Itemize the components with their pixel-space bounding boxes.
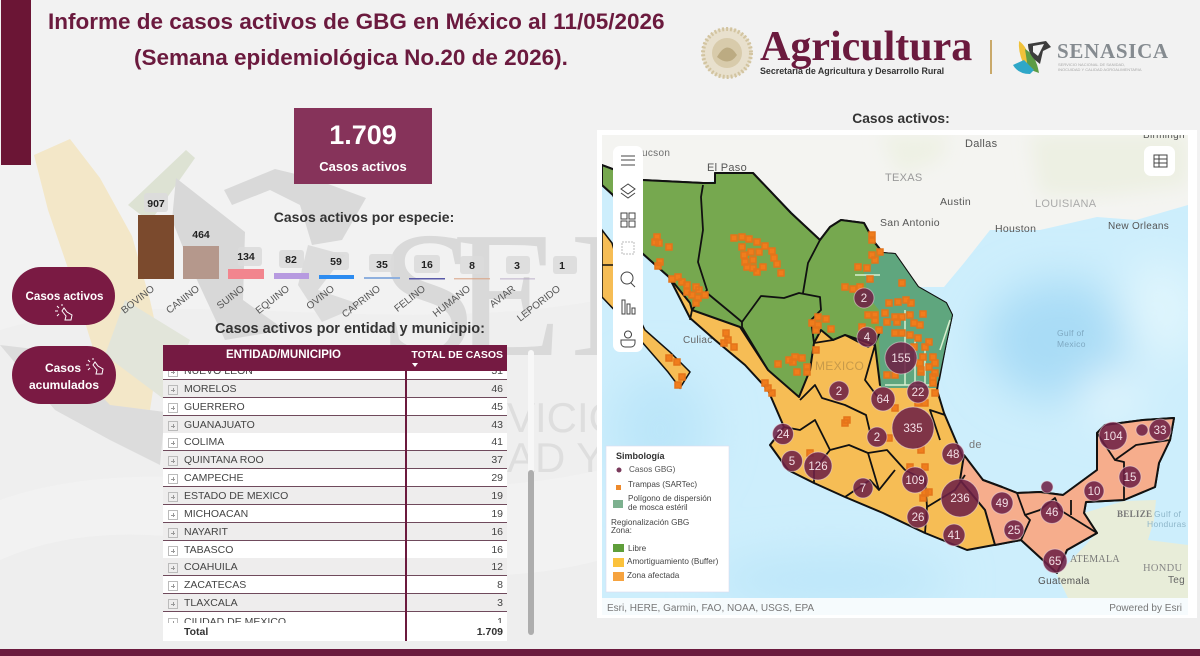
table: casos por entidad	[163, 345, 507, 641]
legend: regionalizacion	[611, 518, 689, 535]
map labels: Birmingh	[1143, 130, 1185, 141]
bar chart: casos por especie	[119, 196, 577, 324]
scrollbar track	[528, 350, 534, 635]
legend: amortiguamiento: Amortiguamiento (Buffer)	[627, 557, 719, 566]
bar chart: casos por especie: LEPORIDO	[515, 284, 563, 324]
bar chart: casos por especie: CAPRINO	[340, 284, 383, 320]
legend: Simbología	[616, 451, 665, 461]
map: cluster counts: 65	[1049, 556, 1061, 568]
table: casos por entidad: NAYARIT	[184, 526, 228, 538]
icon: qr grid	[621, 213, 635, 227]
map: state borders	[690, 185, 1170, 540]
SENASICA subtitle: INOCUIDAD Y CALIDAD AGROALIMENTARIA	[1058, 67, 1142, 72]
map: cluster counts: 155	[891, 353, 911, 365]
map labels: BELIZE	[1117, 509, 1152, 519]
map labels: MEXICO	[815, 359, 864, 373]
map: cluster counts: 335	[903, 423, 923, 435]
legend: poligono: Polígono de dispersión	[628, 494, 712, 503]
map labels: Houston	[995, 223, 1036, 235]
column divider	[405, 371, 407, 641]
map: cluster counts: 109	[905, 475, 925, 487]
table: casos por entidad: COLIMA	[184, 436, 224, 448]
table: casos por entidad: 16	[491, 526, 503, 538]
bar chart: casos por especie: AVIAR	[488, 284, 518, 310]
bar chart: casos por especie: 134	[237, 251, 255, 263]
bar chart: casos por especie: 3	[514, 260, 520, 272]
icon: hand pointer	[55, 304, 72, 320]
map labels: Austin	[940, 196, 971, 208]
SENASICA subtitle	[1058, 62, 1142, 72]
table: casos por entidad: 46	[491, 383, 503, 395]
map labels: Guatemala	[1038, 576, 1090, 587]
bar chart: casos por especie: FELINO	[393, 284, 428, 315]
map: cluster counts: 5	[789, 456, 795, 468]
map: cluster counts: 26	[912, 512, 924, 524]
icon: national emblem	[701, 27, 753, 79]
panel: map	[597, 130, 1197, 618]
legend: regionalizacion: Zona:	[611, 526, 632, 535]
table: casos por entidad: TABASCO	[184, 544, 233, 556]
divider	[990, 40, 992, 74]
table: casos por entidad: QUINTANA ROO	[184, 454, 264, 466]
table: casos por entidad: 3	[497, 597, 503, 609]
legend: zona afectada: Zona afectada	[627, 571, 680, 580]
table: casos por entidad: 19	[491, 508, 503, 520]
table total row: Total	[184, 626, 208, 638]
icon: hand pointer	[86, 358, 104, 374]
map attribution bar: Powered by Esri	[1109, 603, 1182, 614]
map: cluster counts	[777, 293, 1166, 568]
table: casos por entidad: 41	[491, 436, 503, 448]
map labels: HONDU	[1143, 563, 1183, 574]
bar chart: casos por especie: 16	[421, 259, 433, 271]
button: casos activos	[12, 267, 115, 325]
legend: poligono: de mosca estéril	[628, 503, 688, 512]
map labels: Gulf of	[1154, 509, 1181, 519]
Agricultura subtitle: Secretaría de Agricultura y Desarrollo Rural	[760, 66, 944, 76]
map toolbar	[613, 146, 643, 352]
bar chart: casos por especie: 82	[285, 254, 297, 266]
top left accent bar	[1, 0, 31, 165]
table: casos por entidad: 43	[491, 419, 503, 431]
bar chart: casos por especie: 59	[330, 256, 342, 268]
map: case clusters	[772, 288, 1171, 573]
bar chart: casos por especie: BOVINO	[119, 284, 157, 316]
map: cluster counts: 10	[1088, 486, 1100, 498]
map labels: New Orleans	[1108, 221, 1169, 232]
table: casos por entidad: 19	[491, 490, 503, 502]
table: casos por entidad: CAMPECHE	[184, 472, 244, 484]
map: cluster counts: 49	[996, 498, 1008, 510]
legend: regionalizacion: Regionalización GBG	[611, 518, 689, 527]
bar chart: casos por especie: 1	[559, 260, 565, 272]
icon: menu	[621, 156, 635, 165]
Agricultura wordmark: Agricultura	[760, 24, 972, 70]
map labels: Teg	[1168, 575, 1185, 586]
table header: ENTIDAD/MUNICIPIO	[226, 349, 341, 361]
legend	[606, 446, 729, 592]
title: Informe de casos activos de GBG en México al 11/05/2026	[48, 9, 665, 34]
map: cluster counts: 64	[877, 394, 890, 406]
map labels: Dallas	[965, 138, 998, 150]
map labels: El Paso	[707, 162, 747, 174]
button: casos acumulados: Casos	[45, 361, 81, 375]
table: casos por entidad: GUERRERO	[184, 401, 245, 413]
title: (Semana epidemiológica No.20 de 2026).	[134, 45, 568, 70]
SENASICA wordmark: SENASICA	[1057, 39, 1169, 63]
map labels: San Antonio	[880, 217, 940, 229]
map: cluster counts: 24	[777, 429, 790, 441]
land: United States	[602, 135, 1188, 287]
bar chart: casos por especie: HUMANO	[431, 284, 473, 320]
map attribution bar: Esri, HERE, Garmin, FAO, NOAA, USGS, EPA	[607, 603, 814, 614]
map: free zone	[602, 165, 952, 397]
background watermark: AD Y	[507, 434, 604, 481]
background watermark: VICIO	[507, 394, 621, 441]
map: cluster counts: 15	[1124, 472, 1136, 484]
KPI card: casos activos: 1.709	[329, 120, 397, 150]
bar chart: casos por especie: OVINO	[305, 284, 337, 312]
legend: trampas: Trampas (SARTec)	[628, 480, 697, 489]
map: cluster counts: 2	[836, 386, 842, 398]
button: casos acumulados	[12, 346, 116, 404]
button: casos acumulados: acumulados	[29, 378, 99, 392]
map: cluster counts: 236	[950, 493, 970, 505]
table: casos por entidad: ZACATECAS	[184, 579, 246, 591]
map labels: Gulf of	[1057, 328, 1084, 338]
legend: libre: Libre	[628, 544, 647, 553]
map labels: Mexico	[1057, 339, 1086, 349]
bar chart: casos por especie: 464	[192, 229, 210, 241]
map: affected zone	[960, 418, 1174, 573]
table header: TOTAL DE CASOS	[411, 349, 503, 361]
map: cluster counts: 126	[808, 461, 828, 473]
map: cluster counts: 46	[1046, 507, 1058, 519]
icon: layers	[621, 184, 635, 198]
table: casos por entidad: MICHOACAN	[184, 508, 248, 520]
icon: bars	[622, 300, 635, 314]
heading: casos activos map: Casos activos:	[852, 111, 950, 126]
title	[48, 9, 665, 70]
map labels: LOUISIANA	[1035, 198, 1097, 210]
bar chart: casos por especie: 8	[469, 260, 475, 272]
bar chart: casos por especie: 35	[376, 259, 388, 271]
map: cluster counts: 7	[860, 483, 866, 495]
table: casos por entidad: 45	[491, 401, 503, 413]
button: casos activos: Casos activos	[26, 290, 103, 303]
map: cluster counts: 2	[874, 432, 880, 444]
bar chart: casos por especie: 907	[147, 198, 165, 210]
legend: poligono	[613, 494, 712, 512]
map: trap markers	[652, 232, 938, 501]
KPI card: casos activos	[294, 108, 432, 184]
map: cluster counts: 22	[912, 387, 924, 399]
heading: por entidad y municipio: Casos activos por entidad y municipio:	[215, 321, 485, 337]
map: Baja California	[602, 230, 690, 388]
bar chart: casos por especie: SUINO	[215, 284, 247, 312]
map labels: TEXAS	[885, 172, 923, 184]
map: Mexico buffer zone	[602, 165, 1174, 573]
background watermark: SEN	[378, 195, 700, 394]
map labels: ucson	[642, 148, 670, 159]
map labels: de	[969, 439, 982, 451]
map labels: ATEMALA	[1070, 554, 1120, 565]
map labels: Honduras	[1147, 519, 1186, 529]
map: cluster counts: 48	[947, 449, 959, 461]
legend: libre	[613, 544, 647, 553]
heading: por especie: Casos activos por especie:	[274, 209, 454, 225]
table: casos por entidad: 29	[491, 472, 503, 484]
logos header	[701, 24, 1169, 79]
total value: 1.709	[477, 626, 503, 638]
table: casos por entidad: 16	[491, 544, 503, 556]
table: casos por entidad: ESTADO DE MEXICO	[184, 490, 288, 502]
icon: person	[621, 331, 635, 347]
table: casos por entidad: COAHUILA	[184, 561, 238, 573]
map table button	[1144, 146, 1175, 176]
KPI card: casos activos: Casos activos	[319, 159, 407, 174]
icon: search handle	[631, 283, 635, 287]
bar chart: casos por especie: CANINO	[164, 284, 202, 316]
map: cluster counts: 41	[948, 530, 960, 542]
table: casos por entidad: 8	[497, 579, 503, 591]
icon: selection box	[622, 242, 634, 254]
map: cluster counts: 104	[1103, 431, 1123, 443]
table: casos por entidad: GUANAJUATO	[184, 419, 255, 431]
footer bar	[0, 649, 1200, 656]
map: cluster counts: 25	[1008, 525, 1020, 537]
table: casos por entidad: MORELOS	[184, 383, 237, 395]
map labels	[642, 130, 1186, 587]
table: casos por entidad: 12	[491, 561, 503, 573]
table: casos por entidad: 37	[491, 454, 503, 466]
map: sterile fly dispersal polygon	[864, 253, 952, 388]
legend: casos: Casos GBG)	[629, 465, 676, 474]
icon: search	[621, 272, 633, 284]
ocean	[602, 135, 1188, 598]
map attribution bar	[602, 598, 1188, 615]
icon: Senasica	[1013, 41, 1051, 74]
table header	[163, 345, 507, 371]
map: cluster counts: 33	[1154, 425, 1166, 437]
map labels: Culiac	[683, 335, 713, 346]
map: cluster counts: 4	[864, 332, 871, 344]
land: Central America	[1057, 500, 1188, 598]
scrollbar	[528, 470, 534, 635]
bar chart: casos por especie: EQUINO	[254, 284, 292, 317]
table: casos por entidad: TLAXCALA	[184, 597, 238, 609]
SENASICA subtitle: SERVICIO NACIONAL DE SANIDAD,	[1058, 62, 1125, 67]
map: cluster counts: 2	[861, 293, 867, 305]
